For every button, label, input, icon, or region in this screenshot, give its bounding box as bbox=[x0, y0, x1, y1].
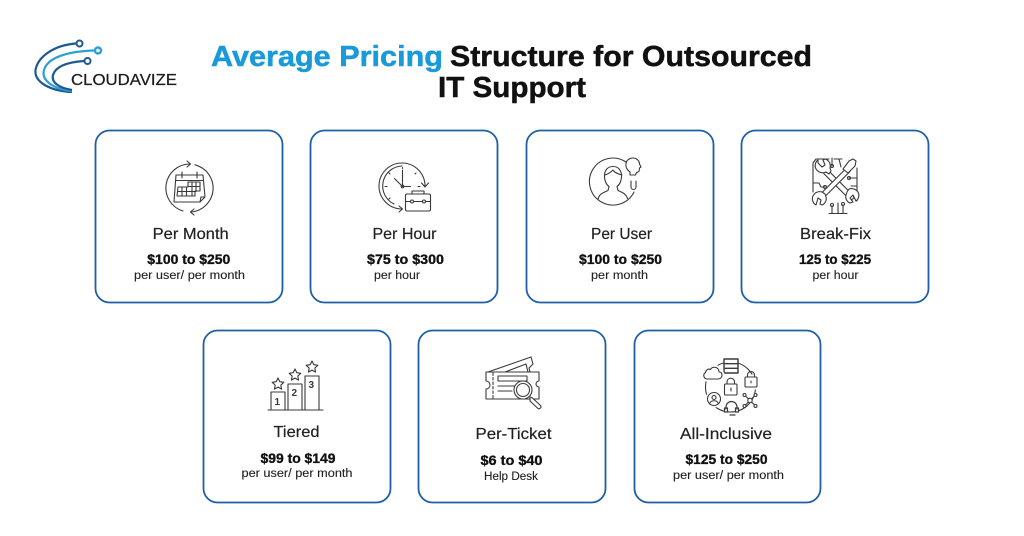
podium numbers: 3 bbox=[308, 380, 314, 391]
heading: Per Hour: Per Hour bbox=[372, 226, 437, 243]
panel: Per Hour bbox=[310, 130, 498, 302]
icon: tickets with magnifier bbox=[486, 357, 541, 409]
unit: per hour: per hour bbox=[374, 270, 420, 282]
unit: per month: per month bbox=[591, 270, 648, 282]
unit: Help Desk: Help Desk bbox=[484, 471, 538, 483]
heading: Per Month: Per Month bbox=[153, 226, 229, 243]
icon: podium with stars bbox=[268, 361, 323, 410]
panel: All-Inclusive bbox=[634, 330, 820, 502]
heading: All-Inclusive: All-Inclusive bbox=[680, 426, 772, 443]
panel: Per-Ticket bbox=[418, 330, 606, 502]
logo: Cloudavize: CLOUDAVIZE bbox=[71, 72, 177, 89]
price: $6 to $40: $6 to $40 bbox=[480, 452, 543, 468]
unit: per user/ per month: per user/ per month bbox=[673, 470, 784, 482]
unit: per hour: per hour bbox=[812, 270, 859, 282]
heading: Break-Fix: Break-Fix bbox=[800, 226, 871, 243]
panel: Tiered bbox=[204, 330, 390, 502]
title bbox=[211, 41, 812, 104]
panel: Break-Fix bbox=[742, 130, 928, 302]
panel: Per User bbox=[526, 130, 714, 302]
logo: Cloudavize bbox=[35, 40, 177, 92]
heading: Per User: Per User bbox=[591, 226, 653, 243]
podium numbers: 1 bbox=[274, 397, 280, 408]
title: Structure for Outsourced bbox=[450, 41, 812, 73]
podium numbers bbox=[274, 380, 314, 408]
price: $99 to $149: $99 to $149 bbox=[260, 450, 336, 466]
title: Average Pricing bbox=[211, 41, 443, 73]
heading: Tiered: Tiered bbox=[274, 424, 320, 441]
icon: clock with briefcase bbox=[379, 163, 430, 212]
unit: per user/ per month: per user/ per month bbox=[134, 270, 245, 282]
unit: per user/ per month: per user/ per month bbox=[242, 468, 352, 480]
price: $100 to $250: $100 to $250 bbox=[579, 251, 662, 267]
price: $75 to $300: $75 to $300 bbox=[367, 251, 444, 267]
icon: calendar with cycle arrows bbox=[166, 161, 213, 215]
price: $125 to $250: $125 to $250 bbox=[686, 451, 768, 467]
podium numbers: 2 bbox=[292, 388, 298, 399]
icon: connected services circle bbox=[704, 359, 757, 415]
icon: crossed wrench and screwdriver on circuit bbox=[812, 158, 859, 214]
title: IT Support bbox=[438, 72, 586, 104]
icon: user with light bulb head bbox=[589, 158, 641, 205]
panel: Per Month bbox=[96, 130, 282, 302]
heading: Per-Ticket: Per-Ticket bbox=[476, 426, 552, 443]
price: 125 to $225: 125 to $225 bbox=[799, 251, 871, 267]
price: $100 to $250: $100 to $250 bbox=[147, 251, 230, 267]
